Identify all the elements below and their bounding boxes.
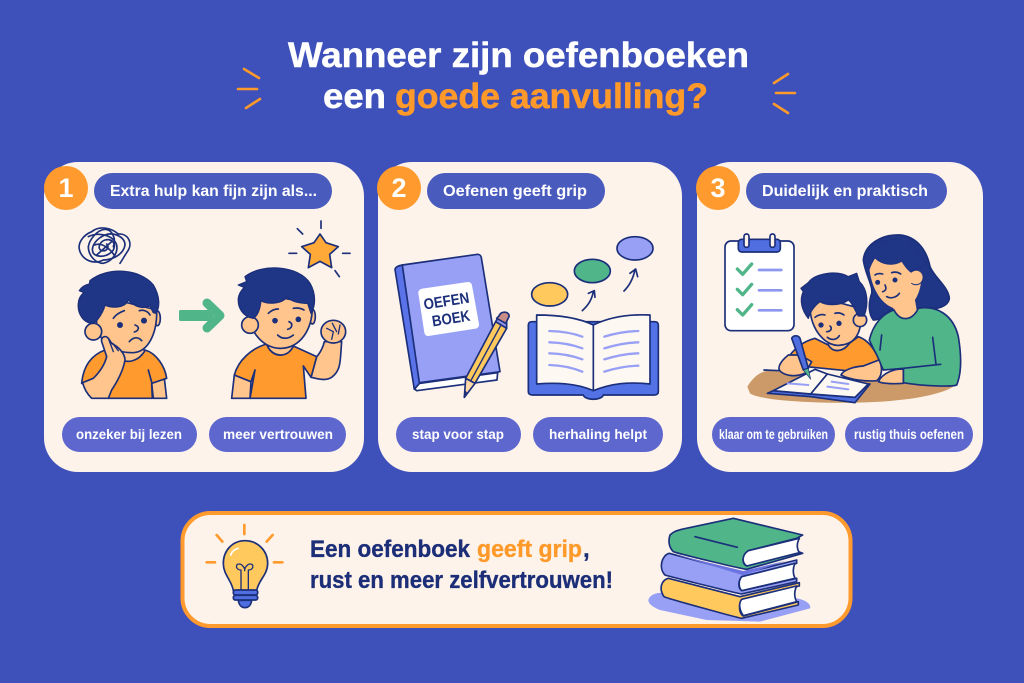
arrows up: [582, 269, 638, 311]
label: herhaling helpt: herhaling helpt: [549, 426, 647, 442]
icon: star with rays: [289, 221, 350, 277]
panel: extra hulp: [44, 162, 364, 472]
illustration: unsure boy: [78, 228, 167, 398]
heading pill 2: Oefenen geeft grip: [443, 183, 587, 200]
closing message: [310, 536, 613, 594]
illustration: parent and child reading: [747, 235, 961, 403]
panel: oefenen geeft grip: [377, 162, 682, 472]
icon: checklist clipboard: [725, 234, 794, 331]
number badge 1: 1: [58, 173, 74, 203]
child: [790, 273, 879, 372]
purple book: [661, 553, 797, 594]
open book: [767, 369, 870, 403]
illustration: workbook and pencil: [395, 254, 509, 398]
heading pill 1: Extra hulp kan fijn zijn als...: [110, 183, 317, 200]
heading pill 1: [94, 173, 332, 209]
panel: duidelijk en praktisch: [696, 162, 983, 472]
icon: tangled thoughts: [79, 228, 130, 263]
title: [288, 36, 749, 116]
table: [747, 370, 953, 403]
number badge 2: [377, 166, 421, 210]
illustration: confident boy: [232, 268, 346, 398]
closing message: geeft grip: [477, 536, 582, 563]
hands and pencil: [779, 336, 881, 381]
icon: light bulb: [207, 525, 282, 608]
label: rustig thuis oefenen: [845, 417, 973, 452]
panel: closing banner: [182, 513, 850, 626]
number badge 3: [696, 166, 740, 210]
closing message: rust en meer zelfvertrouwen!: [310, 567, 613, 594]
label: stap voor stap: [396, 417, 521, 452]
number badge 1: [44, 166, 88, 210]
label: herhaling helpt: [533, 417, 663, 452]
title: goede aanvulling?: [395, 77, 708, 116]
green book: [669, 518, 803, 569]
number badge 3: 3: [710, 173, 726, 203]
icon: stack of books: [648, 518, 810, 622]
heading pill 3: [746, 173, 947, 209]
icon: right title sparks: [774, 74, 795, 113]
step ovals: [532, 237, 653, 306]
title: Wanneer zijn oefenboeken: [288, 36, 749, 75]
title: een: [323, 77, 386, 116]
parent: [863, 235, 961, 386]
label: meer vertrouwen: meer vertrouwen: [223, 426, 333, 442]
label: onzeker bij lezen: onzeker bij lezen: [76, 426, 182, 442]
closing message: ,: [583, 536, 590, 563]
label: klaar om te gebruiken: [712, 417, 835, 452]
yellow book: [661, 578, 799, 618]
illustration: workbook and pencil: OEFEN: [422, 290, 471, 314]
icon: left title sparks: [238, 69, 260, 108]
heading pill 2: [427, 173, 605, 209]
label: onzeker bij lezen: [62, 417, 197, 452]
heading pill 3: Duidelijk en praktisch: [762, 183, 928, 200]
label: stap voor stap: stap voor stap: [412, 426, 504, 442]
illustration: open book with steps: [528, 237, 658, 399]
arrow: green: [179, 303, 220, 328]
number badge 2: 2: [391, 173, 407, 203]
closing message: Een oefenboek: [310, 536, 471, 563]
illustration: workbook and pencil: BOEK: [431, 308, 471, 330]
label: meer vertrouwen: [209, 417, 346, 452]
label: rustig thuis oefenen: rustig thuis oefenen: [854, 426, 964, 442]
label: klaar om te gebruiken: klaar om te gebruiken: [719, 426, 828, 442]
